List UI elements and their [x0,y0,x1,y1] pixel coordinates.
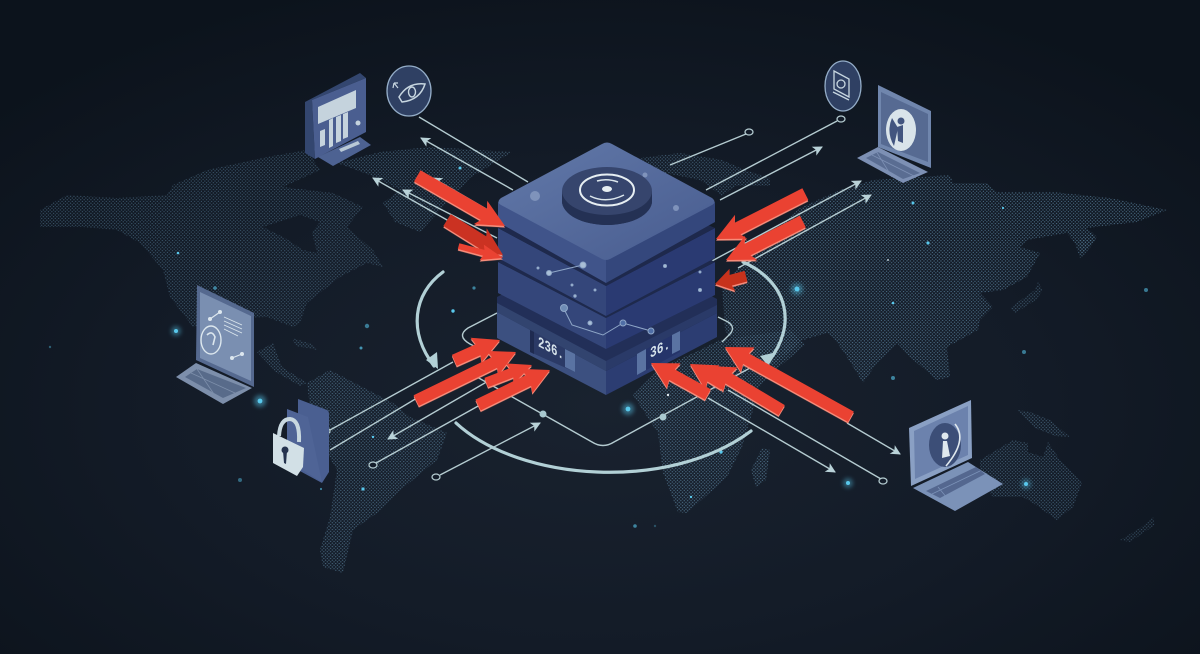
right ring arc [743,262,785,362]
Greenland [337,147,512,232]
arrow head [683,352,731,397]
circuit traces [537,262,702,335]
dotted world map [40,147,1167,573]
right display [637,331,680,375]
red arrows bottom-right [644,335,858,429]
top disc [562,167,652,225]
arrow [482,355,536,393]
arrow [720,209,809,272]
left display [530,330,575,372]
circular ring arcs [417,262,785,472]
arrow [449,327,505,372]
arrow [410,339,522,412]
Sakhalin [1078,232,1096,258]
arrow [710,182,811,251]
arrow [718,335,858,429]
icon: target badge [825,61,861,111]
right display: 36. [650,336,670,363]
arrow dark [712,265,749,296]
left ring arc [417,272,443,366]
icon: laptop bottom right [909,400,1003,511]
red arrows top-left [411,164,512,267]
bottom ring arc [456,423,751,472]
connector nodes [540,410,666,420]
Africa [633,330,805,513]
icon: padlock with door [273,399,329,483]
arrow dark [440,208,510,267]
left display: 236. [538,335,564,365]
arrow [701,354,789,422]
third layer [498,205,715,349]
Australia [980,440,1082,520]
arrow [644,351,715,407]
connector lines [330,117,900,479]
red arrows bottom-left [410,327,556,417]
Japan [1010,282,1043,313]
Central America [257,343,307,386]
Europe [640,153,770,196]
particles [49,166,1148,528]
arrow small [456,238,505,266]
second layer [498,180,715,316]
arrow [411,164,512,238]
icon: laptop top right [857,85,931,183]
New Zealand [1120,517,1155,542]
arrow [472,357,556,417]
Madagascar [751,448,770,487]
server stack [497,142,717,395]
icon: laptop left [176,285,254,404]
base layer [497,240,717,395]
connector end circles [322,116,887,484]
North America [40,150,383,327]
Eurasia [722,175,1167,383]
top slab [498,142,715,283]
red arrows top-right [710,182,811,296]
ring arrowheads [426,352,777,369]
South America [307,370,447,573]
New Guinea [1017,410,1070,437]
icon: monitor [305,73,371,166]
icon: eye badge [387,66,431,116]
Caribbean islands [292,338,318,350]
